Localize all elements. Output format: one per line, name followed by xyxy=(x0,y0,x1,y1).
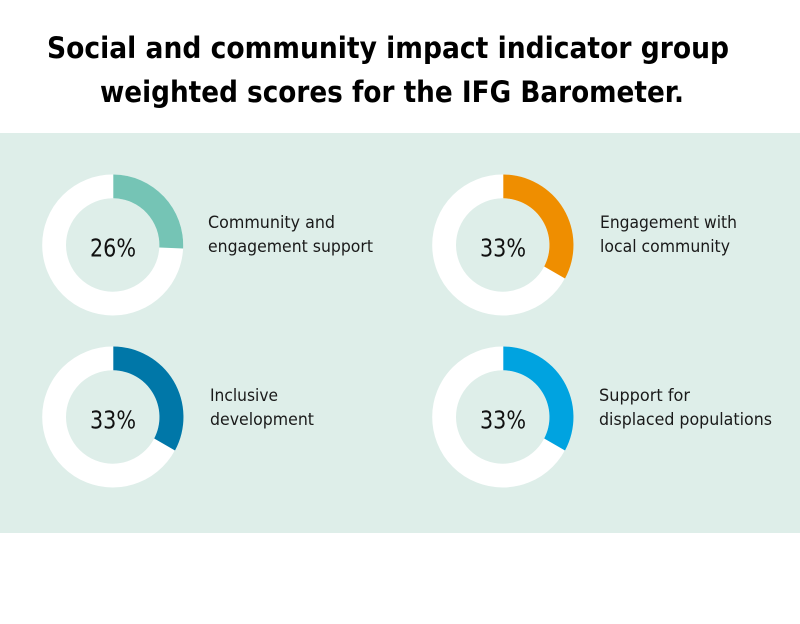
label: inclusive development: Inclusive xyxy=(210,386,278,406)
donut: inclusive development: 33% xyxy=(90,406,136,434)
label: community and engagement support xyxy=(208,213,373,257)
label: support for displaced populations: displaced populations xyxy=(599,410,772,430)
label: inclusive development: development xyxy=(210,410,314,430)
donut: community and engagement support: 26% xyxy=(90,234,136,262)
donut: inclusive development xyxy=(54,346,183,476)
title xyxy=(47,31,729,109)
donut: support for displaced populations: 33% xyxy=(480,406,526,434)
label: community and engagement support: Community and xyxy=(208,213,335,233)
label: engagement with local community: Engagement with xyxy=(600,213,737,233)
donut: engagement with local community xyxy=(444,174,573,304)
label: support for displaced populations: Support for xyxy=(599,386,690,406)
label: support for displaced populations xyxy=(599,386,772,430)
donut: support for displaced populations xyxy=(444,346,573,476)
donut: community and engagement support xyxy=(54,174,183,304)
title: Social and community impact indicator group xyxy=(47,31,729,65)
label: engagement with local community: local community xyxy=(600,237,730,257)
label: engagement with local community xyxy=(600,213,737,257)
label: community and engagement support: engagement support xyxy=(208,237,373,257)
panel: background xyxy=(0,133,800,533)
donut: engagement with local community: 33% xyxy=(480,234,526,262)
title: weighted scores for the IFG Barometer. xyxy=(100,75,684,109)
label: inclusive development xyxy=(210,386,314,430)
